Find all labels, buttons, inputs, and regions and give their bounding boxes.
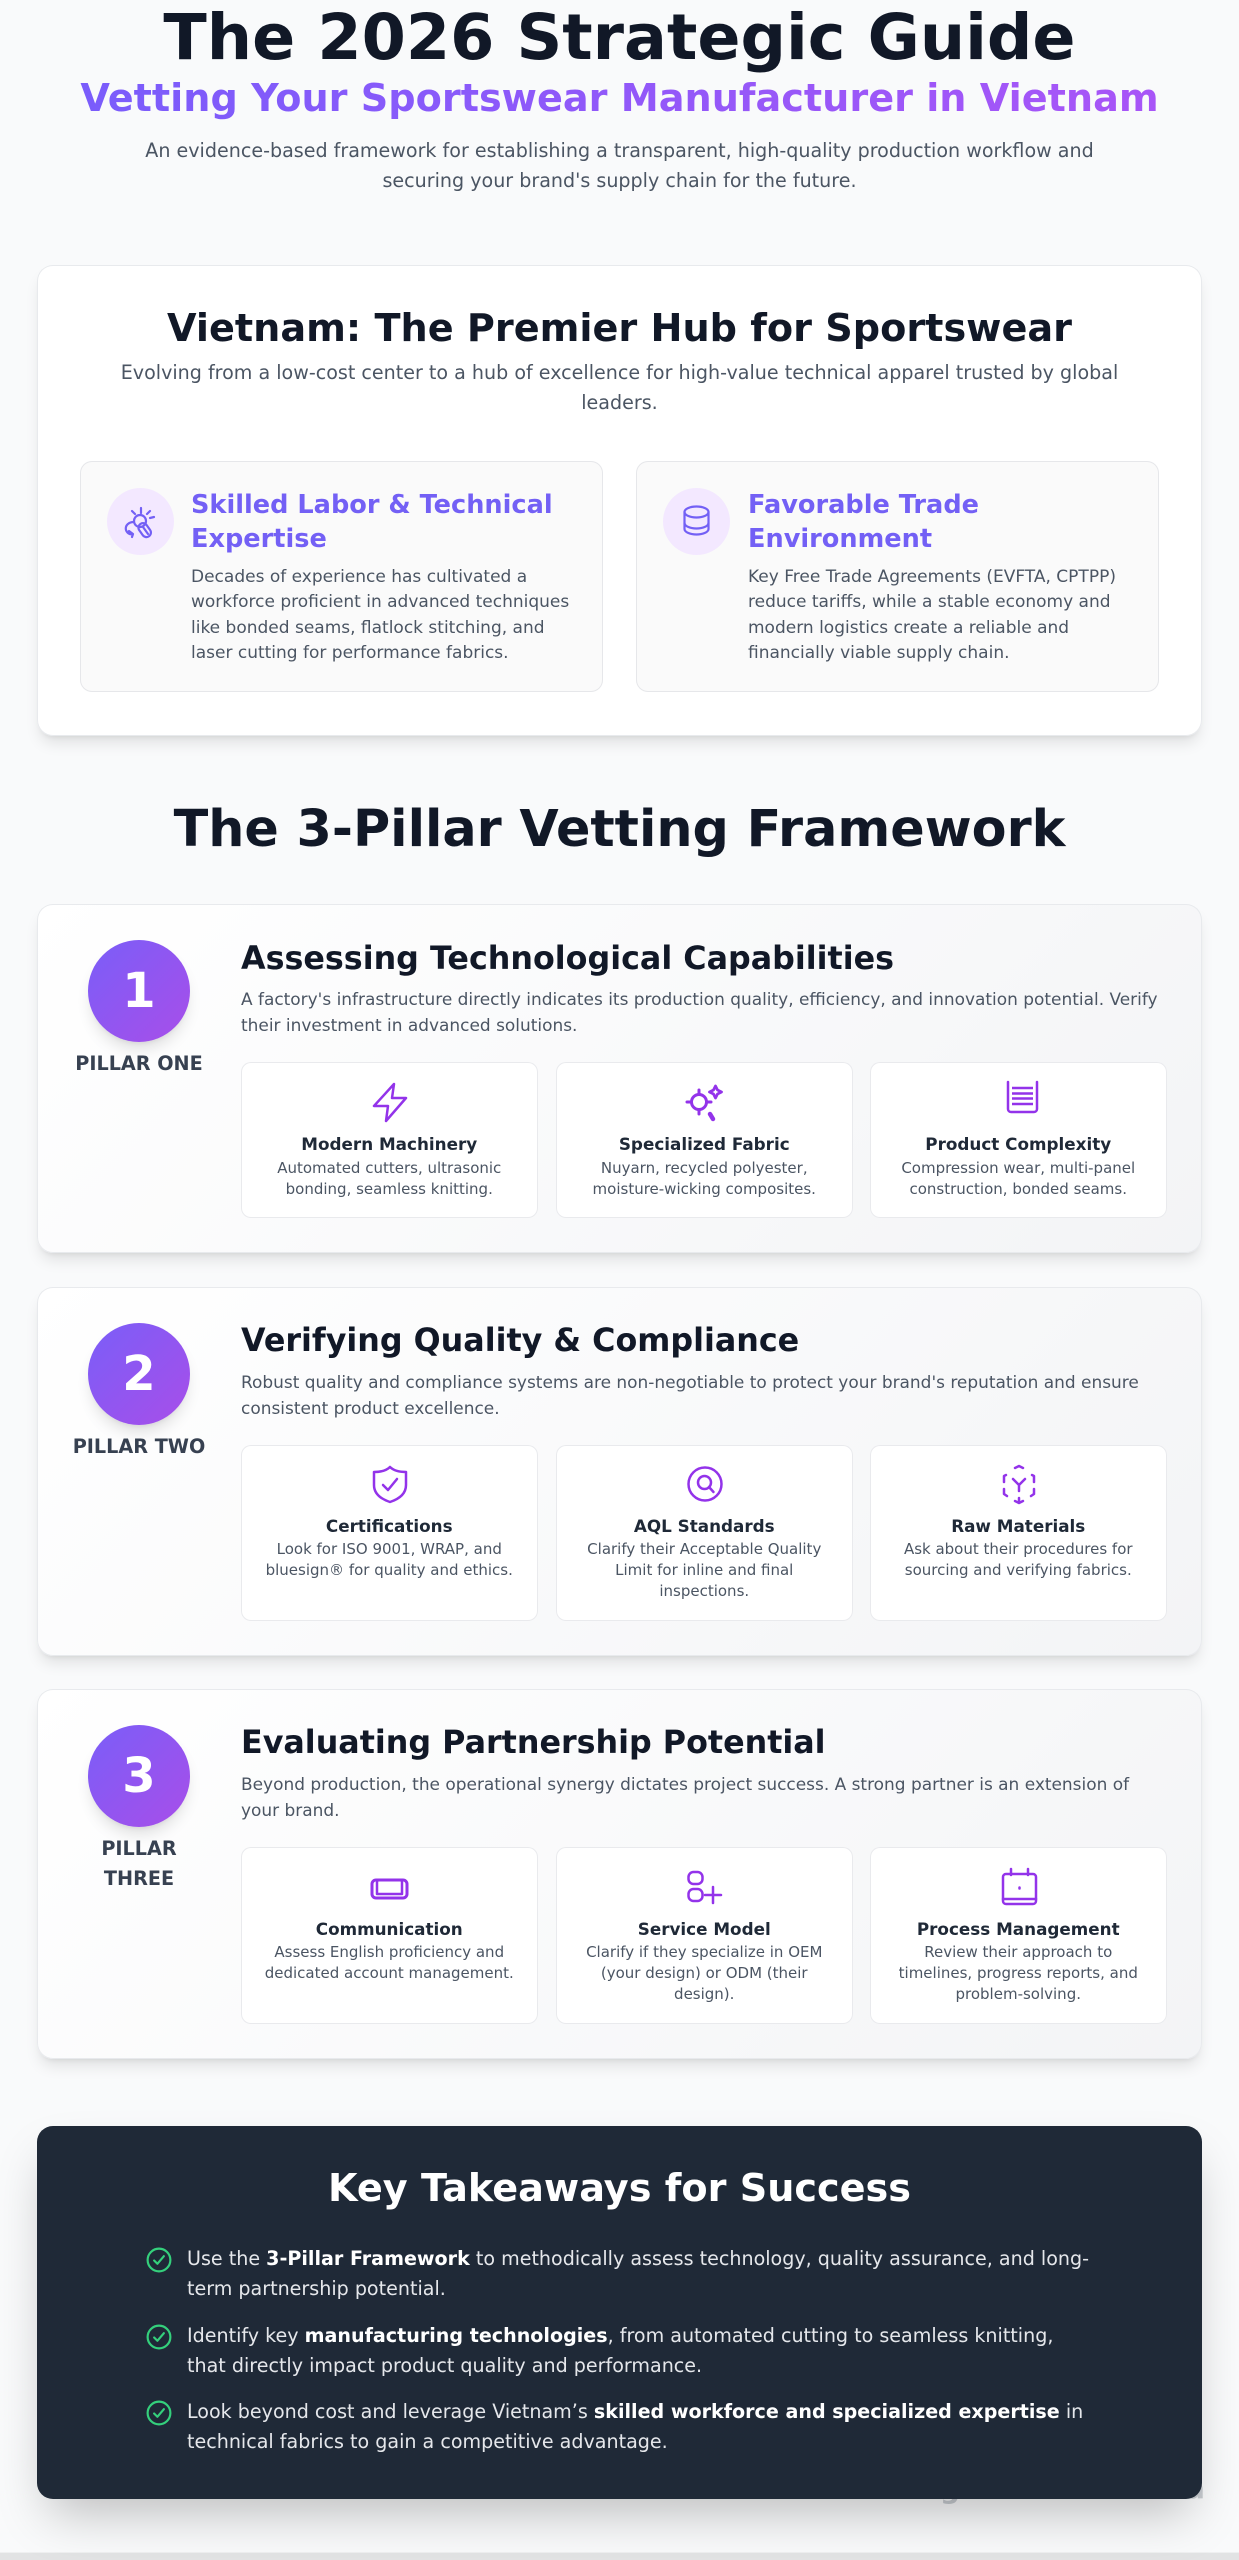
takeaway text: Use the 3-Pillar Framework to methodically assess technology, quality assurance, and long-	[187, 2247, 1089, 2270]
pillar text: their investment in advanced solutions.	[241, 1015, 577, 1035]
card: product complexity	[870, 1062, 1167, 1218]
card text	[593, 1159, 816, 1198]
card title: Raw Materials	[951, 1516, 1085, 1536]
icon: shield check	[372, 1466, 408, 1504]
card text	[904, 1540, 1133, 1579]
card text: Review their approach to	[924, 1943, 1112, 1961]
card text: Look for ISO 9001, WRAP, and	[277, 1540, 502, 1558]
card title: AQL Standards	[634, 1516, 775, 1536]
card text: problem-solving.	[956, 1985, 1081, 2003]
card text	[191, 566, 569, 663]
card: AQL standards	[556, 1445, 853, 1621]
card text	[587, 1540, 821, 1600]
card text: Assess English proficiency and	[274, 1943, 504, 1961]
card text: sourcing and verifying fabrics.	[905, 1561, 1132, 1579]
card title: Process Management	[917, 1919, 1120, 1939]
icon: check	[146, 2324, 172, 2350]
icon: calendar	[1002, 1868, 1038, 1906]
card text: Clarify if they specialize in OEM	[586, 1943, 822, 1961]
card heading	[748, 490, 979, 554]
icon: service model	[687, 1870, 722, 1904]
takeaway text	[187, 2247, 1089, 2300]
pillar heading: Verifying Quality & Compliance	[241, 1322, 799, 1358]
number badge	[88, 1323, 190, 1425]
takeaway 1	[146, 2247, 1089, 2300]
card title: Certifications	[326, 1516, 453, 1536]
pillar label: THREE	[104, 1867, 174, 1890]
icon: check	[146, 2248, 172, 2272]
pillar text: Robust quality and compliance systems are non-negotiable to protect your brand's reputation and ensure	[241, 1372, 1139, 1392]
card title: Modern Machinery	[301, 1134, 477, 1154]
icon: document lines	[1006, 1080, 1038, 1114]
pillar label	[101, 1837, 177, 1890]
card text	[266, 1540, 513, 1579]
card: skilled labor	[80, 461, 603, 692]
card heading: Environment	[748, 524, 932, 554]
takeaways heading: Key Takeaways for Success	[328, 2167, 911, 2211]
card text: Limit for inline and final	[615, 1561, 793, 1579]
panel: pillar one	[37, 904, 1202, 1253]
takeaway text	[187, 2400, 1083, 2452]
card text: design).	[674, 1985, 734, 2003]
pillar text: A factory's infrastructure directly indicates its production quality, efficiency, and innovation potential. Verify	[241, 988, 1158, 1008]
heading: Vietnam hub: Vietnam: The Premier Hub for Sportswear	[167, 306, 1072, 350]
card text: dedicated account management.	[265, 1964, 514, 1982]
footer text hidden behind the dark panel: a	[1186, 2472, 1205, 2505]
number badge: 3	[122, 1748, 156, 1804]
card text: inspections.	[659, 1582, 749, 1600]
card text: workforce proficient in advanced techniques	[191, 592, 569, 612]
takeaway 2	[146, 2324, 1053, 2376]
card title: Service Model	[638, 1919, 771, 1939]
card: process management	[870, 1847, 1167, 2024]
card text: Automated cutters, ultrasonic	[277, 1159, 501, 1177]
takeaway text: Identify key manufacturing technologies, from automated cutting to seamless knitting,	[187, 2324, 1053, 2346]
hub intro text	[121, 361, 1118, 414]
pillar label: PILLAR	[101, 1837, 177, 1860]
card text: Ask about their procedures for	[904, 1540, 1133, 1558]
panel: key takeaways	[37, 2126, 1202, 2499]
card title: Specialized Fabric	[619, 1134, 790, 1154]
card text: reduce tariffs, while a stable economy and	[748, 592, 1111, 612]
footer text hidden behind the dark panel: g	[940, 2472, 960, 2505]
takeaway text: term partnership potential.	[187, 2277, 446, 2300]
card text: bonding, seamless knitting.	[286, 1180, 493, 1198]
card text: construction, bonded seams.	[910, 1180, 1127, 1198]
panel: pillar three	[37, 1689, 1202, 2059]
card text: Nuyarn, recycled polyester,	[601, 1159, 808, 1177]
icon: bolt	[372, 1082, 408, 1122]
card text: bluesign® for quality and ethics.	[266, 1561, 513, 1579]
takeaway text	[187, 2324, 1053, 2376]
card text: Clarify their Acceptable Quality	[587, 1540, 821, 1558]
card: communication	[240, 1847, 538, 2024]
icon: communication	[370, 1878, 408, 1900]
number badge: 2	[122, 1346, 156, 1402]
number badge: 1	[122, 963, 156, 1019]
pillar label: PILLAR ONE	[75, 1052, 203, 1075]
card text: modern logistics create a reliable and	[748, 618, 1069, 638]
intro text: An evidence-based framework for establishing a transparent, high-quality production workflow and	[145, 139, 1094, 162]
card heading: Expertise	[191, 524, 327, 554]
card: trade environment	[636, 461, 1159, 692]
pillar heading: Evaluating Partnership Potential	[241, 1724, 826, 1760]
hub intro text: leaders.	[581, 391, 658, 414]
card text: Compression wear, multi-panel	[901, 1159, 1135, 1177]
number badge	[88, 940, 190, 1042]
icon: sparkles	[686, 1084, 723, 1122]
panel: Vietnam hub	[37, 265, 1202, 736]
card text: like bonded seams, flatlock stitching, and	[191, 618, 545, 638]
pillar text	[241, 1372, 1139, 1418]
card text: Decades of experience has cultivated a	[191, 566, 527, 586]
card heading	[191, 490, 553, 554]
icon: check	[146, 2400, 172, 2426]
card text	[901, 1159, 1135, 1198]
icon: database	[663, 488, 730, 555]
heading: framework: The 3-Pillar Vetting Framework	[174, 799, 1065, 858]
icon: skilled labor	[107, 488, 174, 555]
card text: timelines, progress reports, and	[899, 1964, 1138, 1982]
number badge	[88, 1725, 190, 1827]
card text: financially viable supply chain.	[748, 643, 1010, 663]
card text	[586, 1943, 822, 2003]
card: raw materials	[870, 1445, 1167, 1621]
pillar text: consistent product excellence.	[241, 1398, 500, 1418]
card title: Communication	[316, 1919, 463, 1939]
card text: (your design) or ODM (their	[601, 1964, 808, 1982]
icon: dashed hexagon	[1002, 1464, 1036, 1504]
footer text hidden behind the dark panel	[940, 2472, 1205, 2505]
takeaway 3	[146, 2400, 1083, 2452]
subtitle: Vetting Your Sportswear Manufacturer in Vietnam	[80, 77, 1159, 121]
pillar text	[241, 1774, 1130, 1820]
takeaway text: that directly impact product quality and performance.	[187, 2354, 702, 2376]
card title: Product Complexity	[925, 1134, 1111, 1154]
pillar text: your brand.	[241, 1800, 340, 1820]
card: specialized fabric	[556, 1062, 853, 1218]
card text: Key Free Trade Agreements (EVFTA, CPTPP)	[748, 566, 1116, 586]
card text: moisture-wicking composites.	[593, 1180, 816, 1198]
pillar label: PILLAR TWO	[73, 1435, 205, 1458]
card text	[899, 1943, 1138, 2003]
card text: laser cutting for performance fabrics.	[191, 643, 509, 663]
card: service model	[556, 1847, 853, 2024]
pillar text	[241, 988, 1158, 1035]
footer strip	[0, 2552, 1239, 2560]
card: modern machinery	[240, 1062, 538, 1218]
icon: magnifier	[687, 1466, 723, 1502]
pillar heading: Assessing Technological Capabilities	[241, 940, 894, 976]
card heading: Skilled Labor & Technical	[191, 490, 553, 520]
intro text: securing your brand's supply chain for the future.	[382, 169, 857, 192]
card text	[265, 1943, 514, 1982]
card text	[748, 566, 1116, 663]
title: The 2026 Strategic Guide	[163, 0, 1076, 74]
takeaway text: Look beyond cost and leverage Vietnam’s skilled workforce and specialized expertise in	[187, 2400, 1083, 2422]
card text	[277, 1159, 501, 1198]
pillar text: Beyond production, the operational synergy dictates project success. A strong partner is an extension of	[241, 1774, 1129, 1794]
takeaway text: technical fabrics to gain a competitive advantage.	[187, 2430, 668, 2452]
panel: pillar two	[37, 1287, 1202, 1656]
intro text	[145, 139, 1094, 192]
card: certifications	[240, 1445, 538, 1621]
card heading: Favorable Trade	[748, 490, 979, 520]
hub intro text: Evolving from a low-cost center to a hub of excellence for high-value technical apparel trusted by global	[121, 361, 1118, 384]
